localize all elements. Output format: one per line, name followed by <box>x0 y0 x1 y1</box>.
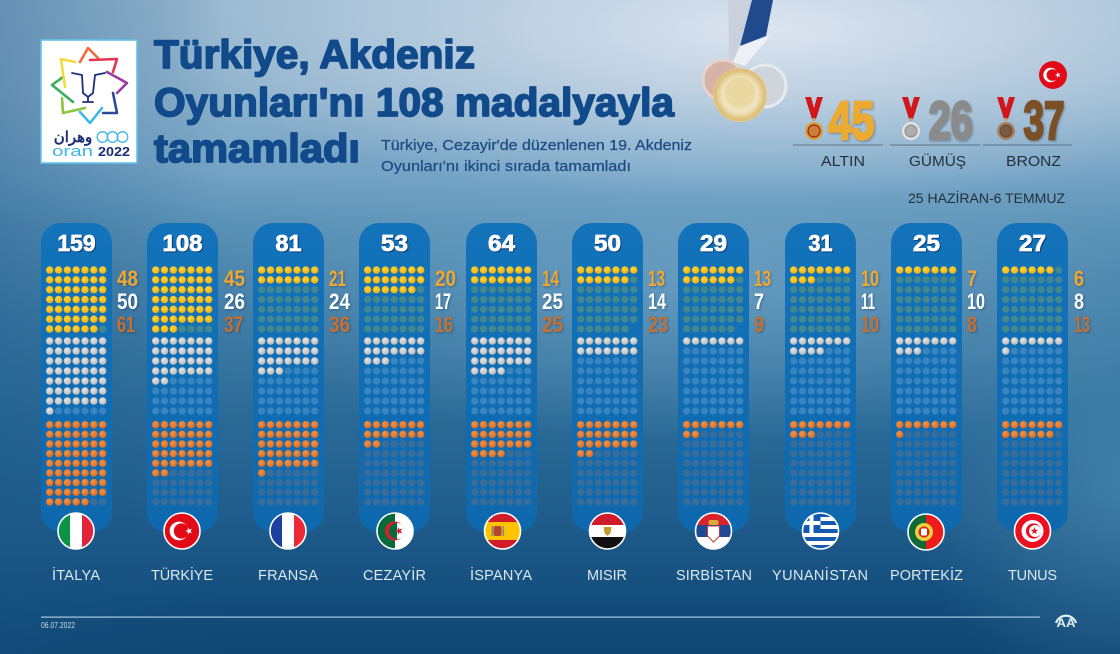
total: 27 <box>1019 230 1046 256</box>
logo: Oran 2022: وهران <box>54 129 92 146</box>
label: Mısır: MISIR <box>587 568 627 584</box>
gold dots <box>1001 265 1054 275</box>
medal counts: 13 <box>1074 312 1090 337</box>
silver dots <box>470 336 532 376</box>
medal counts: 7 <box>754 289 764 314</box>
silver label: GÜMÜŞ <box>909 152 966 170</box>
bronze label: BRONZ <box>1006 153 1061 170</box>
column: İspanya <box>466 223 563 532</box>
medal counts <box>861 266 879 337</box>
silver dots <box>576 336 638 356</box>
medal counts: 50 <box>117 289 138 314</box>
gold dots <box>45 265 107 334</box>
medal counts: 24 <box>329 289 351 314</box>
bronze dots <box>1001 420 1063 439</box>
gold dots <box>151 265 213 334</box>
medal counts: 9 <box>754 312 764 337</box>
bronze dots <box>789 420 851 439</box>
medal counts: 14 <box>648 289 667 314</box>
silver dots <box>45 336 107 416</box>
medal counts: 10 <box>861 312 879 337</box>
silver dots <box>789 336 851 356</box>
flag: Fransa <box>270 513 306 549</box>
medal counts: 25 <box>542 289 563 314</box>
medal counts: 10 <box>861 266 879 291</box>
label: Türkiye: TÜRKİYE <box>151 566 213 584</box>
total: 159 <box>58 230 96 256</box>
silver dots <box>1001 336 1063 356</box>
column: İtalya <box>41 223 138 532</box>
label: Portekiz: PORTEKİZ <box>890 566 963 584</box>
flag: Portekiz <box>908 514 944 550</box>
bronze dots <box>151 420 213 478</box>
medal counts: 61 <box>117 312 135 337</box>
flag: Tunus <box>1014 513 1050 549</box>
gold total: 45 <box>828 91 874 151</box>
label: İspanya: İSPANYA <box>470 566 532 584</box>
label: Tunus: TUNUS <box>1008 568 1057 584</box>
icon: silver medal <box>902 97 920 140</box>
icon: AA logo: AA <box>1056 616 1076 630</box>
date: 06.07.2022 <box>41 621 75 630</box>
logo: Oran 2022 <box>41 40 137 163</box>
label: Cezayir: CEZAYİR <box>363 566 426 584</box>
medal counts: 21 <box>329 266 346 291</box>
title <box>154 33 675 171</box>
silver dots <box>363 336 425 366</box>
medal counts <box>224 266 245 337</box>
total: 64 <box>488 230 515 256</box>
flag: Türkiye <box>164 513 200 549</box>
date range: 25 HAZİRAN-6 TEMMUZ <box>908 189 1065 206</box>
medal counts: 17 <box>435 289 451 314</box>
label: İtalya: İTALYA <box>52 566 100 584</box>
gold dots <box>470 265 532 285</box>
subtitle: Oyunları'nı ikinci sırada tamamladı <box>381 159 631 175</box>
column: Yunanistan <box>785 223 879 532</box>
silver dots <box>151 336 213 386</box>
column: Türkiye <box>147 223 245 532</box>
total: 50 <box>594 230 621 256</box>
title: tamamladı <box>154 127 360 171</box>
medal counts <box>967 266 985 337</box>
medal counts: 26 <box>224 289 245 314</box>
subtitle: Türkiye, Cezayir'de düzenlenen 19. Akdeniz <box>381 138 692 154</box>
flag: Yunanistan <box>802 513 838 549</box>
medal counts: 8 <box>967 312 977 337</box>
silver dots <box>257 336 319 376</box>
medal counts: 23 <box>648 312 668 337</box>
total: 29 <box>700 230 727 256</box>
logo: Oran 2022: oran <box>52 143 93 160</box>
medal counts: 13 <box>754 266 771 291</box>
bronze dots <box>363 420 425 449</box>
gold dots <box>363 265 425 295</box>
medal counts <box>435 266 456 337</box>
medal counts: 20 <box>435 266 456 291</box>
gold dots <box>576 265 638 285</box>
bronze dots <box>682 420 744 439</box>
total: 108 <box>162 230 203 256</box>
medal counts <box>1074 266 1090 337</box>
column: Mısır <box>572 223 668 532</box>
medal counts <box>329 266 351 337</box>
medal counts: 25 <box>542 312 563 337</box>
label: Fransa: FRANSA <box>258 568 318 584</box>
column: Portekiz <box>891 223 985 532</box>
silver total: 26 <box>928 91 972 151</box>
gold dots <box>682 265 744 285</box>
label: Yunanistan: YUNANİSTAN <box>772 566 868 584</box>
medal counts: 10 <box>967 289 985 314</box>
medal counts: 36 <box>329 312 350 337</box>
total: 31 <box>808 230 833 256</box>
icon: bronze medal <box>997 97 1015 140</box>
label: Sırbistan: SIRBİSTAN <box>676 566 752 584</box>
flag: İspanya <box>484 513 520 549</box>
flag: Cezayir <box>377 513 413 549</box>
bronze total: 37 <box>1024 91 1064 151</box>
flag: Sırbistan <box>696 513 732 549</box>
gold dots <box>789 265 851 285</box>
title: Türkiye, Akdeniz <box>154 33 475 77</box>
silver dots <box>682 336 744 346</box>
icon: Turkish flag <box>1039 61 1067 89</box>
gold label: ALTIN <box>821 153 865 170</box>
icon: gold medal <box>805 97 823 140</box>
flag: Mısır <box>590 513 626 549</box>
bronze dots <box>576 420 638 458</box>
tally: bronze <box>983 91 1072 170</box>
flag: İtalya <box>58 513 94 549</box>
medal counts <box>754 266 771 337</box>
medal counts <box>648 266 668 337</box>
bronze dots <box>470 420 532 458</box>
tally: gold <box>793 91 883 170</box>
medal counts: 11 <box>861 289 875 314</box>
medal counts <box>542 266 563 337</box>
gold dots <box>257 265 319 285</box>
medal counts: 8 <box>1074 289 1084 314</box>
total: 25 <box>913 230 940 256</box>
bronze dots <box>895 420 957 439</box>
medal counts: 6 <box>1074 266 1084 291</box>
medal counts: 48 <box>117 266 138 291</box>
total: 81 <box>276 230 302 256</box>
column: Cezayir <box>359 223 456 532</box>
total: 53 <box>381 230 408 256</box>
medal counts: 16 <box>435 312 453 337</box>
medal counts: 13 <box>648 266 665 291</box>
subtitle <box>381 138 692 175</box>
tally: silver <box>890 91 980 170</box>
medal counts: 45 <box>224 266 245 291</box>
bronze dots <box>257 420 319 478</box>
gold dots <box>895 265 957 275</box>
logo: Oran 2022: 2022 <box>98 144 130 159</box>
medal counts: 37 <box>224 312 243 337</box>
icon: medals with ribbon <box>703 0 786 122</box>
bronze dots <box>45 420 107 507</box>
medal counts <box>117 266 138 337</box>
title: Oyunları'nı 108 madalyayla <box>154 81 675 125</box>
medal counts: 14 <box>542 266 560 291</box>
medal counts: 7 <box>967 266 977 291</box>
column: Fransa <box>253 223 351 532</box>
silver dots <box>895 336 957 356</box>
column: Tunus <box>997 223 1090 532</box>
column: Sırbistan <box>678 223 771 532</box>
